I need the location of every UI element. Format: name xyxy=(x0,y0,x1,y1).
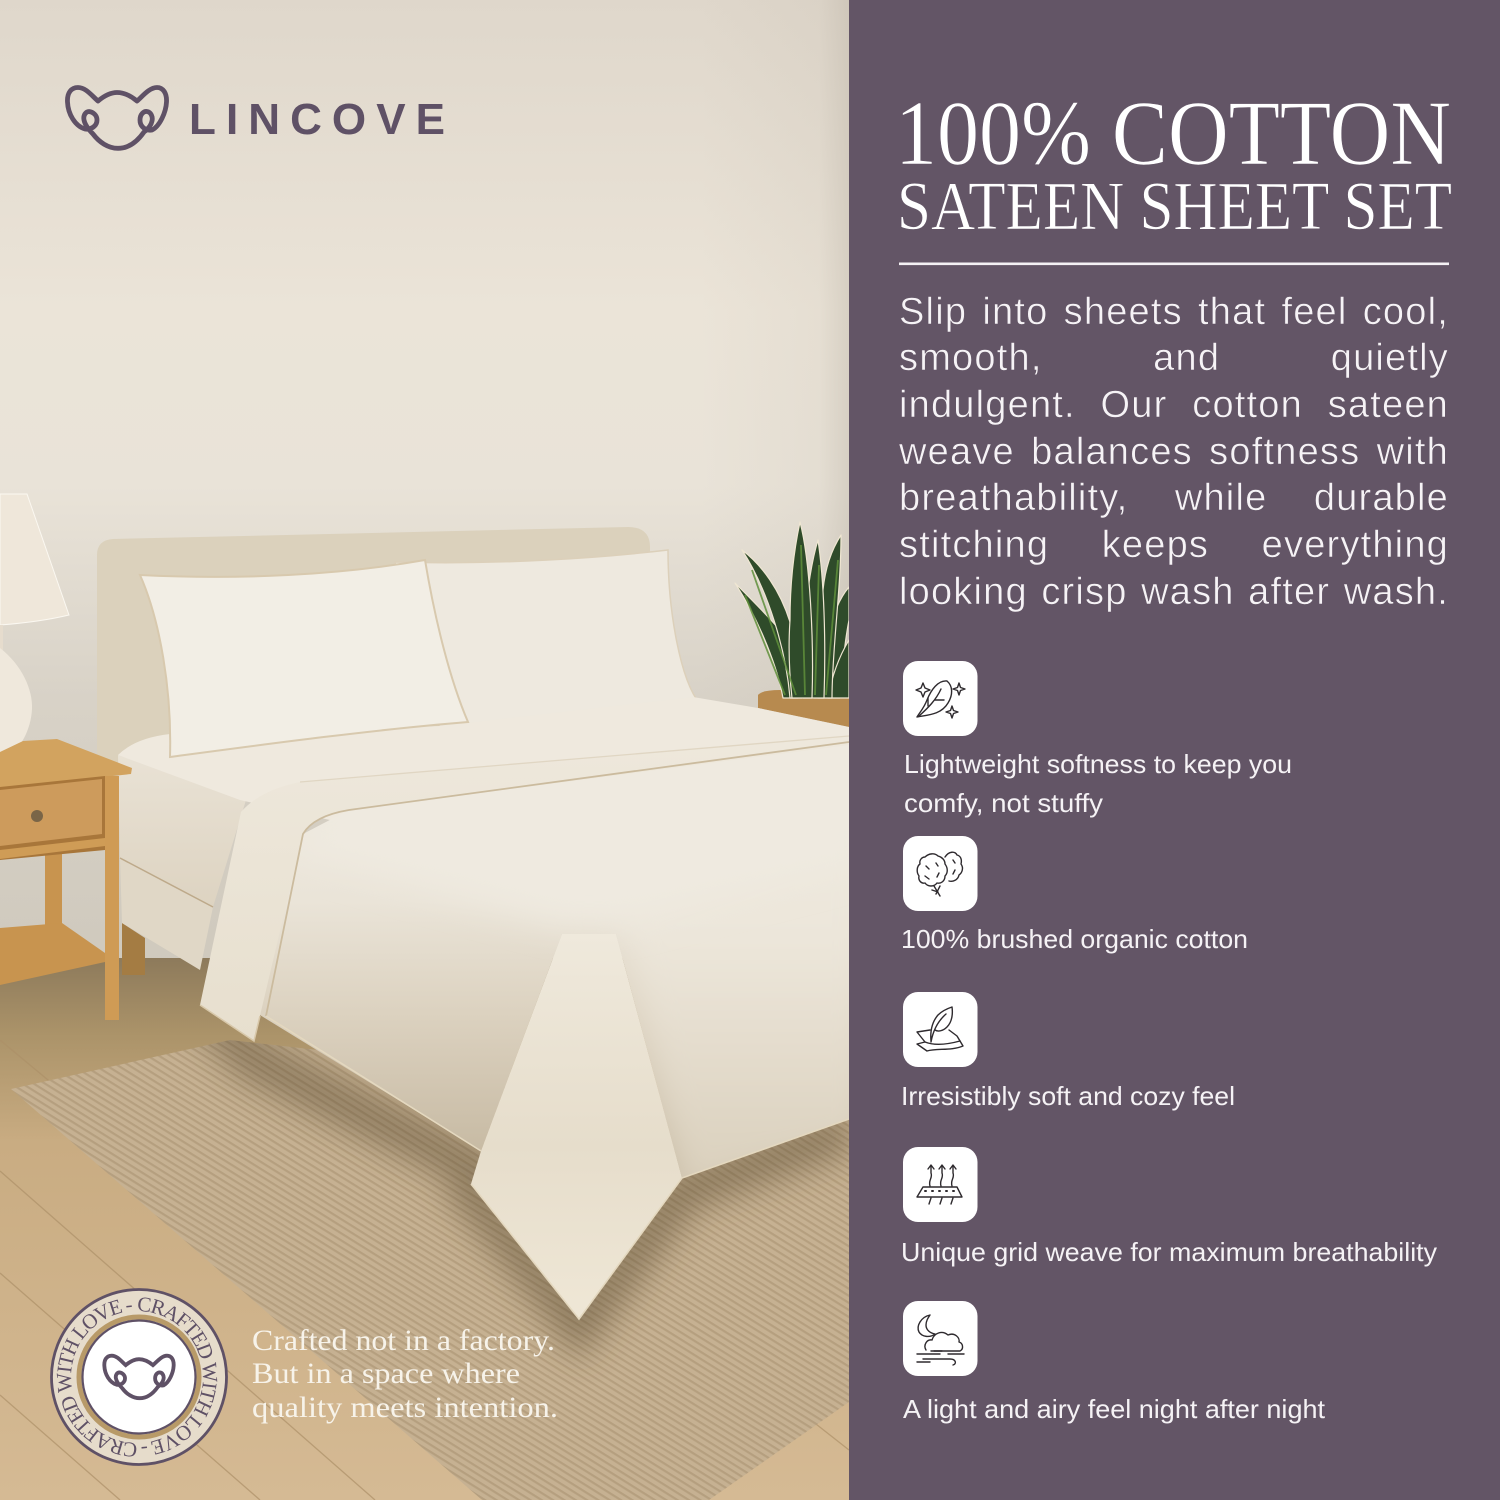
body copy xyxy=(899,290,1449,613)
bedroom photo xyxy=(0,0,870,1500)
mattress top xyxy=(118,697,849,820)
feature text: brushed organic cotton: 100% brushed organic cotton xyxy=(901,924,1248,954)
feature text: lightweight softness: Lightweight softness to keep you xyxy=(904,749,1292,779)
icon tile: soft and cozy xyxy=(903,992,978,1067)
pillow back xyxy=(395,550,700,730)
icon tile: feather softness xyxy=(903,661,978,736)
body copy: indulgent. Our cotton sateen xyxy=(899,384,1449,426)
lamp xyxy=(0,494,69,759)
nightstand xyxy=(0,739,132,1020)
feature text: light and airy: A light and airy feel night after night xyxy=(903,1394,1326,1424)
icon tile: cotton xyxy=(903,836,978,911)
caption: crafted not in a factory: But in a space where xyxy=(252,1357,520,1390)
title: 100% COTTON xyxy=(895,82,1451,184)
caption: crafted not in a factory: Crafted not in a factory. xyxy=(252,1324,555,1357)
feature text: grid weave: Unique grid weave for maximum breathability xyxy=(901,1237,1437,1267)
wall xyxy=(0,0,849,970)
icon: bear logo xyxy=(67,88,167,148)
badge ring text: CRAFTED WITH LOVE - CRAFTED WITH LOVE - xyxy=(56,1298,218,1456)
badge: crafted with love xyxy=(50,1288,228,1466)
feature text: lightweight softness xyxy=(904,749,1292,818)
bed base xyxy=(118,755,246,975)
title xyxy=(895,82,1452,244)
feature text: lightweight softness: comfy, not stuffy xyxy=(904,788,1103,818)
body copy: smooth, and quietly xyxy=(899,337,1449,379)
body copy: stitching keeps everything xyxy=(899,524,1449,566)
floor xyxy=(0,958,849,1500)
caption: crafted not in a factory xyxy=(252,1324,558,1424)
body copy: looking crisp wash after wash. xyxy=(899,571,1449,613)
headboard xyxy=(97,527,650,770)
logo wordmark: LINCOVE xyxy=(189,95,445,144)
feature text: irresistibly soft: Irresistibly soft and cozy feel xyxy=(901,1081,1235,1111)
title rule xyxy=(899,262,1449,265)
caption: crafted not in a factory: quality meets intention. xyxy=(252,1391,558,1424)
flat sheet xyxy=(200,730,870,1319)
icon tile: breathable weave xyxy=(903,1147,978,1222)
pillow front xyxy=(140,560,468,757)
body copy: weave balances softness with xyxy=(899,431,1449,473)
body copy: Slip into sheets that feel cool, xyxy=(899,290,1449,332)
icon tile: night breeze xyxy=(903,1301,978,1376)
panel: product details xyxy=(849,0,1500,1500)
badge bear icon xyxy=(104,1356,174,1398)
logo xyxy=(67,88,445,148)
plant xyxy=(735,522,849,727)
body copy: breathability, while durable xyxy=(899,477,1449,519)
rug xyxy=(11,1000,849,1500)
